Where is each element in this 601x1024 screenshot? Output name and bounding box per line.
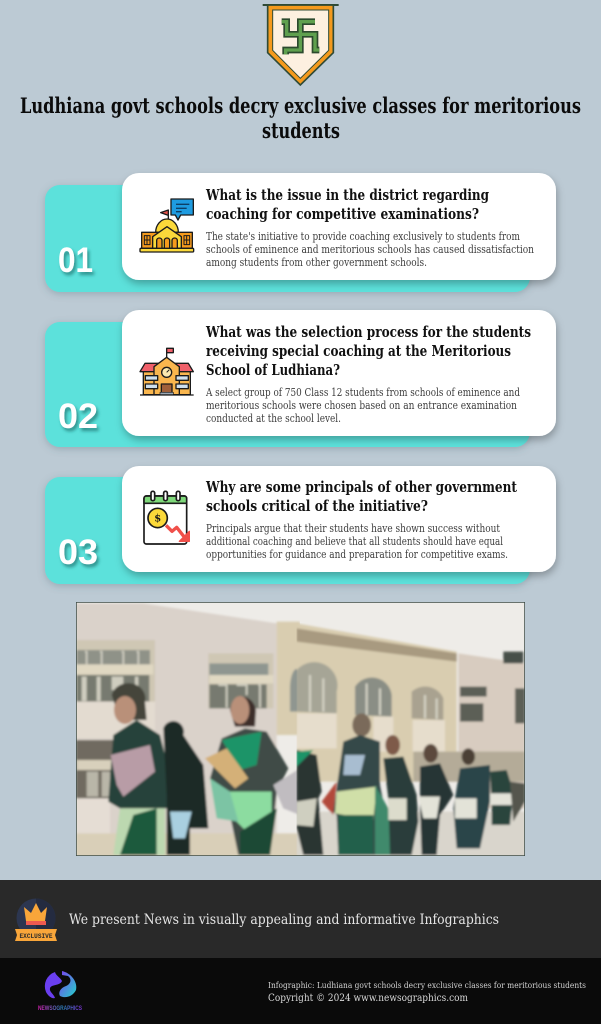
panel: question 3 xyxy=(45,466,556,584)
icon: shield emblem xyxy=(263,5,339,85)
title xyxy=(20,93,581,143)
logo wordmark: NEWSOGRAPHICS xyxy=(38,1005,82,1012)
icon: newsographics logo xyxy=(38,971,82,1012)
heading 1: What is the issue in the district regarding xyxy=(205,186,489,204)
icon: calendar with falling money chart xyxy=(144,491,189,544)
heading 1 xyxy=(205,186,489,223)
student three xyxy=(385,735,400,755)
white card 1 xyxy=(122,173,556,280)
teal backing card 2 xyxy=(45,322,530,447)
body text 3: Principals argue that their students have shown success without xyxy=(206,522,500,535)
photo left half xyxy=(76,603,300,858)
body text 1: among students from other government schools. xyxy=(206,256,427,269)
footer band: tagline xyxy=(0,880,601,958)
student one xyxy=(108,720,172,808)
white card 2 xyxy=(122,310,556,436)
panel: question 1 xyxy=(45,173,556,292)
body text 1: The state's initiative to provide coaching exclusively to students from xyxy=(206,230,520,243)
heading 2: School of Ludhiana? xyxy=(206,361,340,379)
photo right half xyxy=(297,623,525,858)
photo frame xyxy=(76,602,525,856)
student group xyxy=(423,744,438,763)
heading 3 xyxy=(205,478,517,515)
body text 3: opportunities for guidance and preparation for competitive exams. xyxy=(206,548,508,561)
photo: students walking outside the school building xyxy=(76,602,525,858)
body text 2: conducted at the school level. xyxy=(206,412,341,425)
body text 3 xyxy=(206,522,508,561)
teal backing card 1 xyxy=(45,185,530,292)
body text 2 xyxy=(205,386,520,425)
body text 2: A select group of 750 Class 12 students from schools of eminence and xyxy=(205,386,520,399)
body text 1 xyxy=(206,230,534,269)
icon: calendar with falling money chart: $ xyxy=(154,514,161,525)
white card 3 xyxy=(122,466,556,572)
heading 3: schools critical of the initiative? xyxy=(206,497,428,515)
icon: exclusive crown badge xyxy=(15,898,57,941)
number 01: 01 xyxy=(58,241,93,280)
icon: exclusive crown badge: EXCLUSIVE xyxy=(20,933,53,940)
heading 2: receiving special coaching at the Meritorious xyxy=(206,342,511,360)
number 03: 03 xyxy=(58,533,98,572)
icon: school building xyxy=(140,348,194,395)
tagline text: We present News in visually appealing and informative Infographics xyxy=(69,912,499,928)
title: students xyxy=(262,118,340,143)
heading 2 xyxy=(205,323,531,379)
teal backing card 3 xyxy=(45,477,530,584)
left-edge student continuation xyxy=(297,750,323,855)
footer band: credits xyxy=(0,958,601,1024)
student two xyxy=(230,697,256,727)
copyright line: Copyright © 2024 www.newsographics.com xyxy=(268,993,468,1004)
body text 3: additional coaching and believe that all students should have equal xyxy=(206,535,503,548)
panel: question 2 xyxy=(45,310,556,447)
icon: government building with speech bubble xyxy=(140,199,194,252)
centre student xyxy=(352,713,371,737)
heading 2: What was the selection process for the students xyxy=(205,323,531,341)
heading 1: coaching for competitive examinations? xyxy=(206,205,479,223)
number 02: 02 xyxy=(58,397,98,436)
body text 1: schools of eminence and meritorious schools has caused dissatisfaction xyxy=(206,243,534,256)
body text 2: meritorious schools were chosen based on an entrance examination xyxy=(206,399,517,412)
heading 3: Why are some principals of other government xyxy=(205,478,517,496)
student behind xyxy=(163,721,208,855)
